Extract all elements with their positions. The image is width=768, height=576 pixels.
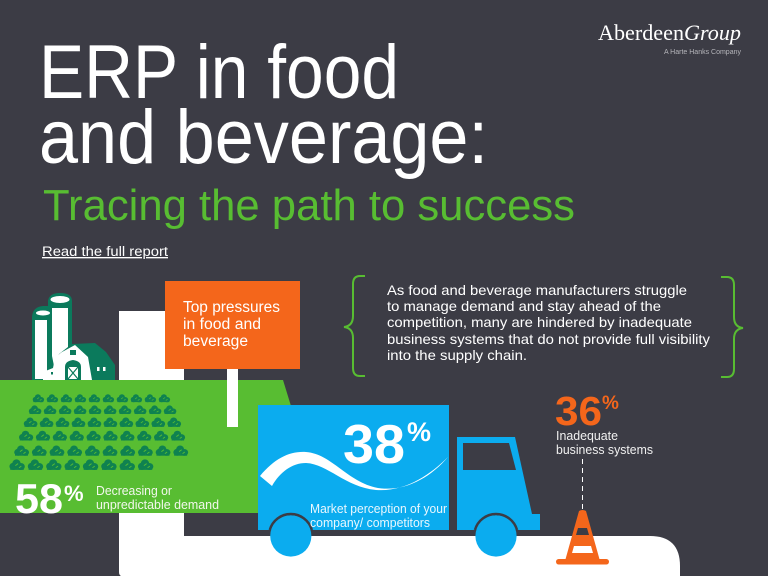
left brace [344, 276, 365, 376]
logo: Aberdeen Group [598, 20, 741, 56]
stat: 58% demand [15, 475, 219, 522]
title [39, 30, 488, 180]
sign: top pressures: beverage [183, 333, 248, 350]
title: ERP in food [39, 30, 399, 115]
stat: 36% inadequate systems: 36 [555, 388, 602, 434]
stat: 38%: % [407, 417, 431, 447]
intro paragraph: into the supply chain. [387, 348, 527, 363]
right wheel [475, 514, 517, 557]
sign: top pressures: in food and [183, 316, 261, 333]
logo: Aberdeen Group: A Harte Hanks Company [664, 49, 741, 56]
stat: 58% demand: 58 [15, 475, 63, 522]
title: and beverage: [39, 95, 488, 180]
truck box [258, 405, 449, 530]
truck caption: Market perception of your [310, 501, 448, 516]
stat: 58% demand: Decreasing or [96, 483, 173, 498]
dashed line [582, 459, 584, 510]
signpost [227, 369, 238, 427]
cab window [463, 443, 516, 470]
link: read the full report: Read the full report [42, 244, 168, 259]
sign: top pressures: Top pressures [183, 299, 280, 316]
white road [119, 311, 680, 576]
stat: 58% demand: % [64, 481, 84, 506]
stat: 58% demand: unpredictable demand [96, 497, 219, 512]
crop field: cabbage rows [9, 394, 188, 470]
icon: traffic cone [556, 510, 609, 564]
left wheel [270, 514, 312, 557]
stat: 36% inadequate systems [555, 388, 653, 457]
logo: Aberdeen Group: AberdeenGroup [598, 20, 741, 45]
right brace [721, 277, 743, 377]
truck [258, 405, 540, 557]
sign: top pressures [165, 281, 300, 369]
intro paragraph: competition, many are hindered by inadequate [387, 315, 692, 330]
subtitle: Tracing the path to success [43, 181, 575, 230]
stat: 38% [343, 413, 431, 475]
green field [0, 380, 291, 513]
stat: 36% inadequate systems: business systems [556, 442, 653, 457]
intro paragraph: business systems that do not provide full visibility [387, 332, 710, 347]
stat: 36% inadequate systems: Inadequate [556, 428, 618, 443]
intro paragraph: to manage demand and stay ahead of the [387, 299, 661, 314]
truck caption: company/ competitors [310, 515, 430, 530]
white swoosh [260, 452, 448, 490]
truck cab [457, 437, 540, 530]
intro paragraph [387, 283, 710, 363]
truck caption [310, 501, 448, 530]
stat: 36% inadequate systems: % [602, 393, 619, 414]
stat: 38%: 38 [343, 413, 405, 475]
icon: farm with silos and barn [32, 293, 115, 380]
intro paragraph: As food and beverage manufacturers struggle [387, 283, 687, 298]
